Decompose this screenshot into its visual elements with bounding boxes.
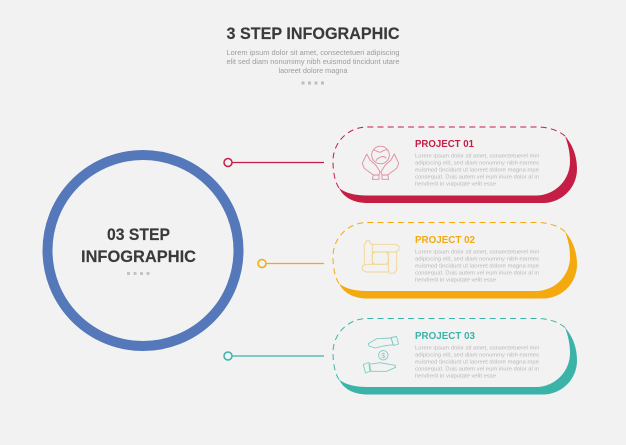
title: 3 STEP INFOGRAPHIC bbox=[226, 24, 400, 43]
panel 2 dashed outline bbox=[333, 222, 565, 284]
panel 1 crescent shape bbox=[339, 136, 577, 203]
connector 1 bbox=[224, 158, 324, 166]
project 01 body bbox=[415, 154, 539, 188]
project 02 body: adipiscing elit, sed diam nonummy nibh earmes bbox=[415, 256, 539, 262]
subtitle text bbox=[226, 50, 400, 75]
project 01 body: Lorem ipsum dolor sit amet, consectetuerel mei bbox=[415, 154, 539, 160]
project 03 body: consequat. Duis autem vel eum iriure dolor al in bbox=[415, 366, 539, 372]
project 03 body: adipiscing elit, sed diam nonummy nibh earmes bbox=[415, 352, 539, 358]
panel: project 02 bbox=[333, 222, 577, 298]
subtitle text: Lorem ipsum dolor sit amet, consectetueri adipiscing bbox=[226, 50, 400, 57]
connector 2 bbox=[258, 260, 324, 268]
panel 1 dashed outline bbox=[333, 127, 565, 188]
project 02 body: consequat. Duis autem vel eum iriure dolor al in bbox=[415, 270, 539, 276]
project 01 body: hendrerit in vulputate velit esse bbox=[415, 182, 496, 188]
panel: project 01 bbox=[333, 127, 577, 203]
circle label: 03 STEP bbox=[107, 225, 170, 244]
title dots bbox=[302, 82, 324, 84]
panel 3 crescent shape bbox=[339, 328, 577, 394]
project 03 body: Lorem ipsum dolor sit amet, consectetuerel mei bbox=[415, 346, 539, 352]
project 02 body bbox=[415, 250, 539, 284]
panel 3 dashed outline bbox=[333, 318, 565, 380]
connector 3 bbox=[224, 352, 324, 360]
project 03 body: euismod tincidunt ut laoreet dolore magna mpe bbox=[415, 360, 539, 366]
project 01 body: consequat. Duis autem vel eum iriure dolor al in bbox=[415, 174, 539, 180]
project 02 heading: PROJECT 02 bbox=[415, 234, 475, 246]
panel: project 03 bbox=[333, 318, 577, 394]
panel 2 crescent shape bbox=[339, 232, 577, 298]
circle label bbox=[81, 225, 196, 266]
subtitle text: laoreet dolore magna bbox=[278, 68, 348, 75]
project 02 body: hendrerit in vulputate velit esse bbox=[415, 278, 496, 284]
main circle ring bbox=[48, 155, 238, 346]
icon: hands holding globe bbox=[362, 146, 399, 179]
project 01 body: euismod tincidunt ut laoreet dolore magna mpe bbox=[415, 168, 539, 174]
project 03 heading: PROJECT 03 bbox=[415, 330, 475, 342]
icon: hands with coin: $ bbox=[381, 351, 386, 360]
project 03 body: hendrerit in vulputate velit esse bbox=[415, 374, 496, 380]
circle dots bbox=[127, 272, 150, 275]
circle label: INFOGRAPHIC bbox=[81, 247, 196, 266]
project 01 body: adipiscing elit, sed diam nonummy nibh earmes bbox=[415, 160, 539, 166]
icon: four interlocked hands bbox=[362, 241, 399, 273]
project 02 body: Lorem ipsum dolor sit amet, consectetuerel mei bbox=[415, 250, 539, 256]
project 02 body: euismod tincidunt ut laoreet dolore magna mpe bbox=[415, 264, 539, 270]
icon: hands with coin bbox=[363, 336, 398, 373]
project 01 heading: PROJECT 01 bbox=[415, 138, 474, 150]
project 03 body bbox=[415, 346, 539, 380]
subtitle text: elit sed diam nonumimy nibh euismod tincidunt utare bbox=[226, 59, 400, 66]
